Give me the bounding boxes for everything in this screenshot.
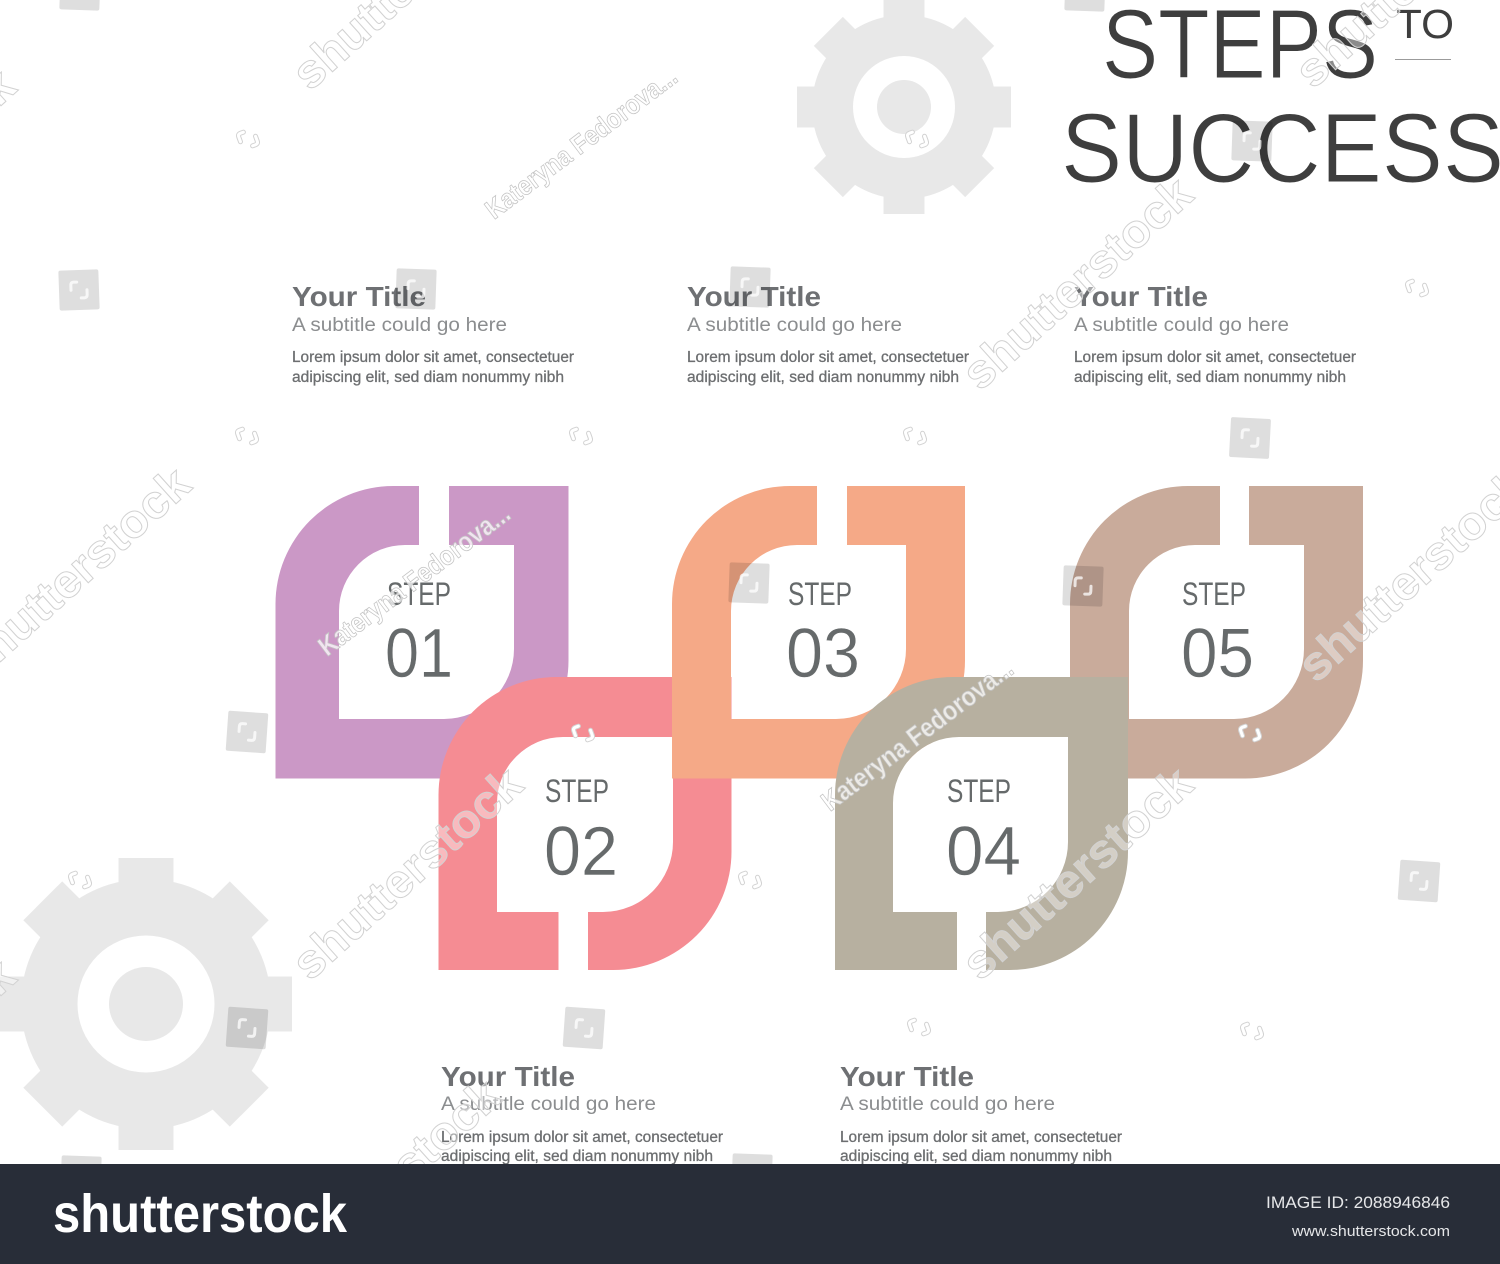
step 05 shape <box>1070 486 1363 778</box>
image id: www.shutterstock.com <box>1291 1224 1450 1240</box>
label: step 01 <box>385 576 453 692</box>
text block: bottom 1: Your Title <box>441 1061 575 1092</box>
text block: top 1 <box>292 281 574 386</box>
watermark text: shutterstock <box>951 165 1203 399</box>
label: step 04 <box>946 773 1021 890</box>
text block: top 3 <box>1074 281 1356 386</box>
image id <box>1266 1194 1450 1240</box>
label: step 02 <box>544 773 618 890</box>
step 01 shape <box>276 486 568 778</box>
text block: top 2: Your Title <box>687 281 821 312</box>
text block: top 3: A subtitle could go here <box>1074 315 1289 336</box>
icon: bottom gear <box>0 858 292 1150</box>
text block: top 3: Lorem ipsum dolor sit amet, consectetuer <box>1074 349 1356 366</box>
watermark text: Kateryna Fedorova... <box>480 61 683 225</box>
label: step 02: STEP <box>545 773 609 809</box>
label: step 03: 03 <box>786 614 860 692</box>
text block: bottom 2: A subtitle could go here <box>840 1094 1055 1115</box>
step 04 shape <box>835 677 1128 970</box>
text block: top 1: Lorem ipsum dolor sit amet, consectetuer <box>292 349 574 366</box>
footer bar <box>0 1164 1500 1264</box>
watermark small marks <box>70 129 1427 1041</box>
text block: top 2: A subtitle could go here <box>687 315 902 336</box>
icon: top gear <box>797 0 1011 214</box>
logo: shutterstock: shutterstock <box>53 1184 348 1244</box>
text block: top 1: adipiscing elit, sed diam nonummy nibh <box>292 369 564 386</box>
text block: top 3: Your Title <box>1074 281 1208 312</box>
label: step 03 <box>786 576 860 692</box>
step 03 shape <box>672 486 965 778</box>
text block: top 2: Lorem ipsum dolor sit amet, consectetuer <box>687 349 969 366</box>
text block: bottom 1 <box>441 1061 723 1165</box>
text block: top 2 <box>687 281 969 386</box>
label: step 05: STEP <box>1182 576 1246 612</box>
watermark text: shutterstock <box>951 755 1203 989</box>
text block: top 1: Your Title <box>292 281 426 312</box>
text block: bottom 2: Lorem ipsum dolor sit amet, consectetuer <box>840 1129 1122 1146</box>
text block: bottom 2: Your Title <box>840 1061 974 1092</box>
image id: IMAGE ID: 2088946846 <box>1266 1194 1450 1212</box>
step 04 inner window <box>893 737 1068 912</box>
label: step 04: STEP <box>947 773 1011 809</box>
text block: top 1: A subtitle could go here <box>292 315 507 336</box>
text block: bottom 1: A subtitle could go here <box>441 1094 656 1115</box>
text block: top 3: adipiscing elit, sed diam nonummy nibh <box>1074 369 1346 386</box>
watermark text: Kateryna Fedorova... <box>816 653 1019 817</box>
text block: top 2: adipiscing elit, sed diam nonummy nibh <box>687 369 959 386</box>
label: step 05 <box>1181 576 1254 692</box>
label: step 01: STEP <box>387 576 451 612</box>
text block: bottom 1: adipiscing elit, sed diam nonummy nibh <box>441 1148 713 1165</box>
label: step 04: 04 <box>946 812 1021 890</box>
text block: bottom 2 <box>840 1061 1122 1165</box>
step 02 inner window <box>497 737 673 912</box>
label: step 01: 01 <box>385 614 453 692</box>
watermark text: shutterstock <box>281 755 533 989</box>
label: step 03: STEP <box>788 576 852 612</box>
text block: bottom 2: adipiscing elit, sed diam nonummy nibh <box>840 1148 1112 1165</box>
label: step 05: 05 <box>1181 614 1254 692</box>
label: step 02: 02 <box>544 812 618 890</box>
step 02 shape <box>438 677 732 970</box>
watermark text: Kateryna Fedorova... <box>313 498 516 662</box>
title: TO <box>1396 1 1454 47</box>
text block: bottom 1: Lorem ipsum dolor sit amet, consectetuer <box>441 1129 723 1146</box>
title <box>1061 0 1500 203</box>
